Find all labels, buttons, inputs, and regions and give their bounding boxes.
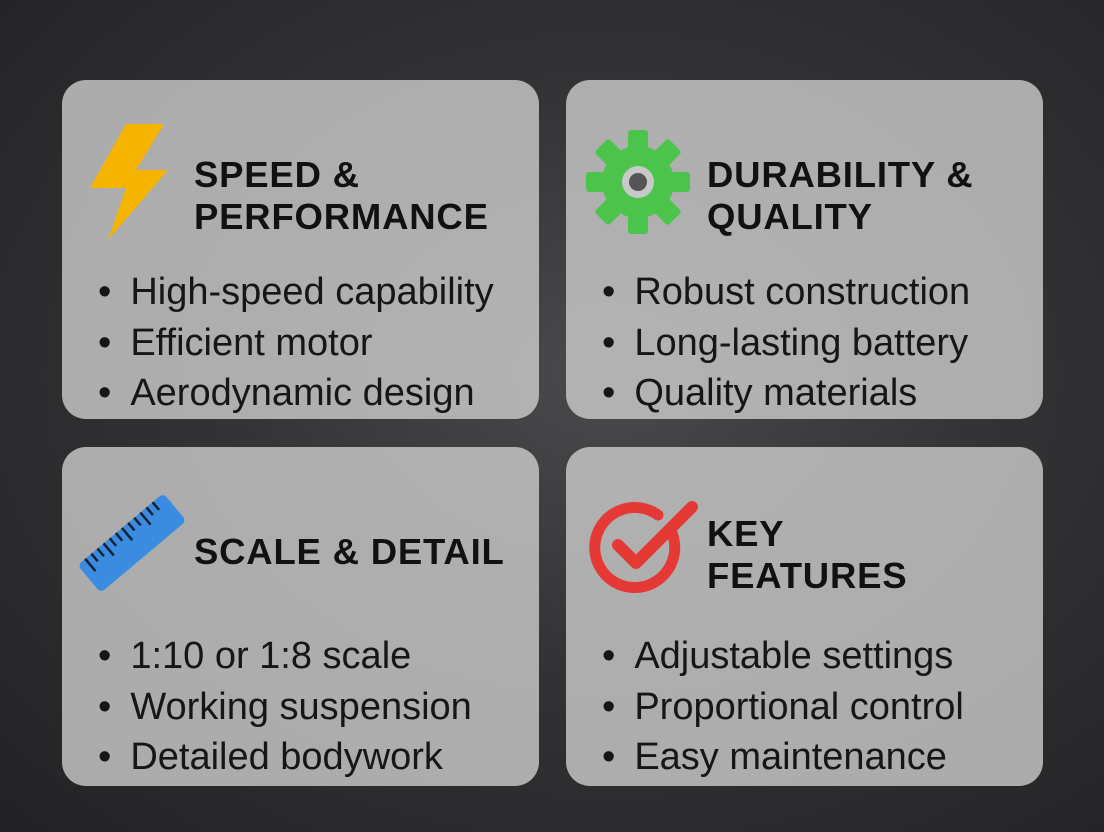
heading (707, 154, 973, 237)
heading: QUALITY (707, 196, 873, 237)
heading: KEY (707, 513, 784, 554)
bullet list: Efficient motor (130, 322, 372, 364)
heading: SPEED & (194, 154, 360, 195)
panel: durability & quality (566, 80, 1043, 419)
heading: PERFORMANCE (194, 196, 489, 237)
panel: key features (566, 447, 1043, 786)
panel: scale & detail (62, 447, 539, 786)
icon: lightning bolt (90, 124, 168, 240)
bullet list: Easy maintenance (634, 736, 947, 778)
bullet list: Aerodynamic design (130, 372, 475, 414)
bullet list: 1:10 or 1:8 scale (130, 635, 411, 677)
heading: DURABILITY & (707, 154, 973, 195)
bullet list: Proportional control (634, 686, 964, 728)
bullet list (100, 271, 494, 414)
heading: SCALE & DETAIL (194, 531, 505, 572)
icon: check circle (589, 501, 698, 593)
bullet list (604, 271, 970, 414)
heading (707, 513, 907, 596)
bullet list: Robust construction (634, 271, 970, 313)
bullet list (100, 635, 472, 778)
bullet list: Long-lasting battery (634, 322, 968, 364)
bullet list: Quality materials (634, 372, 917, 414)
bullet list: Adjustable settings (634, 635, 953, 677)
icon: gear (586, 130, 690, 234)
bullet list: Working suspension (130, 686, 472, 728)
bullet list (604, 635, 964, 778)
bullet list: Detailed bodywork (130, 736, 443, 778)
icon: ruler (80, 495, 184, 591)
panel: speed & performance (62, 80, 539, 419)
heading: FEATURES (707, 555, 907, 596)
heading (194, 154, 489, 237)
bullet list: High-speed capability (130, 271, 494, 313)
